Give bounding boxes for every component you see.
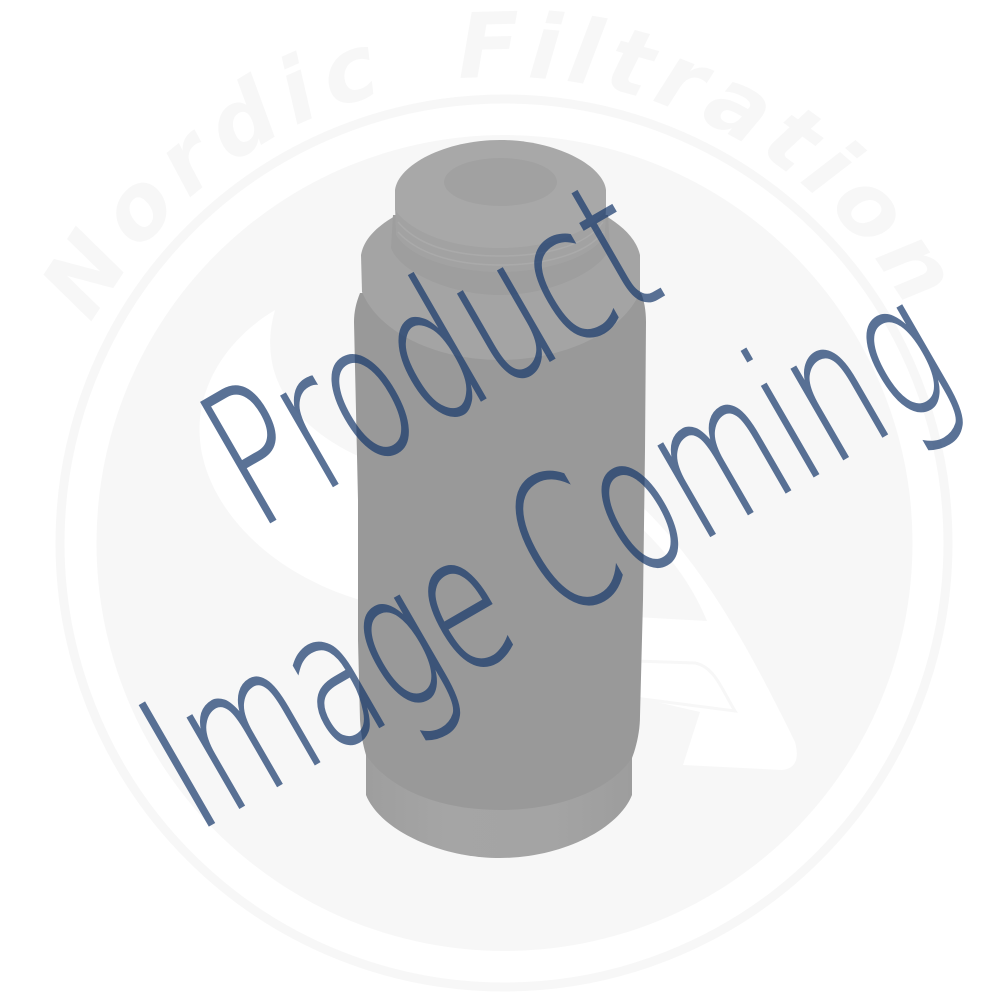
watermark triangle inner line bbox=[635, 661, 735, 711]
cartridge main body bbox=[354, 293, 646, 810]
watermark white crescent bbox=[199, 310, 360, 600]
product label: Product bbox=[169, 140, 692, 569]
cartridge top ring bbox=[395, 140, 606, 248]
cartridge opening bbox=[444, 158, 557, 206]
cartridge shoulder bbox=[361, 216, 640, 360]
cartridge neck groove bbox=[391, 215, 610, 295]
watermark disc bbox=[96, 135, 912, 951]
watermark outer ring bbox=[60, 99, 948, 987]
cartridge threaded neck bbox=[395, 205, 606, 272]
watermark white triangle mark bbox=[635, 500, 797, 770]
cartridge bottom cap bbox=[366, 745, 632, 858]
filter cartridge bbox=[354, 140, 646, 858]
cartridge thread lines bbox=[398, 222, 603, 265]
watermark brand text: Nordic Filtration bbox=[21, 0, 982, 335]
watermark triangle inner cutout bbox=[635, 522, 707, 621]
